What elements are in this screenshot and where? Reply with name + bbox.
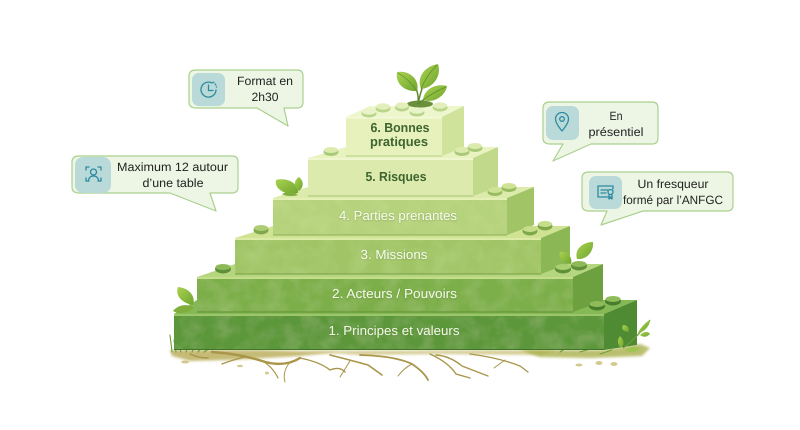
tier 4: Parties prenantes: [273, 187, 534, 236]
front face: [346, 117, 442, 156]
soil specks: [181, 360, 618, 374]
top face: [235, 226, 570, 238]
tier 5: Risques: [308, 147, 498, 196]
soil patch: [407, 100, 433, 108]
tier 6: Bonnes pratiques: pratiques: [370, 134, 428, 149]
callout: format: [189, 70, 303, 126]
plant near tier 1 right: [618, 320, 650, 352]
side face: [473, 147, 498, 196]
icon: clock: [192, 73, 225, 106]
side face: [541, 226, 570, 274]
sprout on top of the pyramid: [397, 64, 447, 108]
text: Un fresqueur: [638, 177, 708, 191]
bubble: [582, 172, 733, 225]
tier 6: Bonnes pratiques: [346, 106, 464, 156]
tier 3: Missions: [235, 226, 570, 274]
callout: fresqueur: [582, 172, 733, 225]
front face: [273, 198, 507, 235]
front face: [235, 238, 541, 274]
label: 5. Risques: [366, 169, 426, 184]
leaves near tier 5: [276, 177, 303, 196]
top face: [174, 300, 637, 314]
icon: map pin: [546, 106, 579, 140]
top face: [346, 106, 464, 117]
bubble: [543, 102, 658, 161]
icon: person in frame: [75, 157, 111, 193]
leaf left: [397, 72, 418, 91]
callout: en présentiel: présentiel: [588, 125, 644, 139]
side face: [507, 187, 534, 235]
label: 1. Principes et valeurs: [328, 323, 460, 338]
text: Format en: [237, 74, 293, 88]
studs: [215, 102, 621, 310]
tier 1: Principes et valeurs: [174, 300, 637, 350]
ground: soil and roots: [170, 335, 650, 382]
front face: [197, 277, 573, 312]
grass tufts: [170, 335, 612, 354]
callout: maximum 12: [72, 156, 238, 211]
callout: en présentiel: [543, 102, 658, 161]
roots: [190, 352, 528, 382]
text: En: [610, 109, 622, 123]
top face: [308, 147, 498, 158]
callout: format: 2h30: [252, 90, 279, 104]
leaf upper right: [420, 64, 439, 89]
text: Maximum 12 autour: [117, 160, 228, 174]
bubble: [72, 156, 238, 211]
label: 2. Acteurs / Pouvoirs: [332, 286, 458, 301]
leaf lower right: [423, 85, 447, 101]
leaves near tier 2 right: [559, 242, 593, 264]
soil band: [170, 350, 340, 361]
top face: [197, 264, 603, 277]
callout: maximum 12: d’une table: [142, 176, 204, 190]
label: 6. Bonnes: [370, 120, 430, 135]
side face: [604, 300, 637, 350]
bubble: [189, 70, 303, 126]
callout: fresqueur: formé par l’ANFGC: [623, 193, 723, 207]
side face: [442, 106, 464, 156]
label: 4. Parties prenantes: [339, 208, 457, 223]
top face: [273, 187, 534, 198]
label: 3. Missions: [360, 247, 428, 262]
front face: [308, 158, 473, 196]
tier 2: Acteurs / Pouvoirs: [197, 264, 603, 312]
leaves near tier 1 left: [173, 287, 194, 313]
stems: [416, 86, 426, 104]
side face: [573, 264, 603, 312]
front face: [174, 314, 604, 350]
icon: certificate: [589, 176, 622, 209]
